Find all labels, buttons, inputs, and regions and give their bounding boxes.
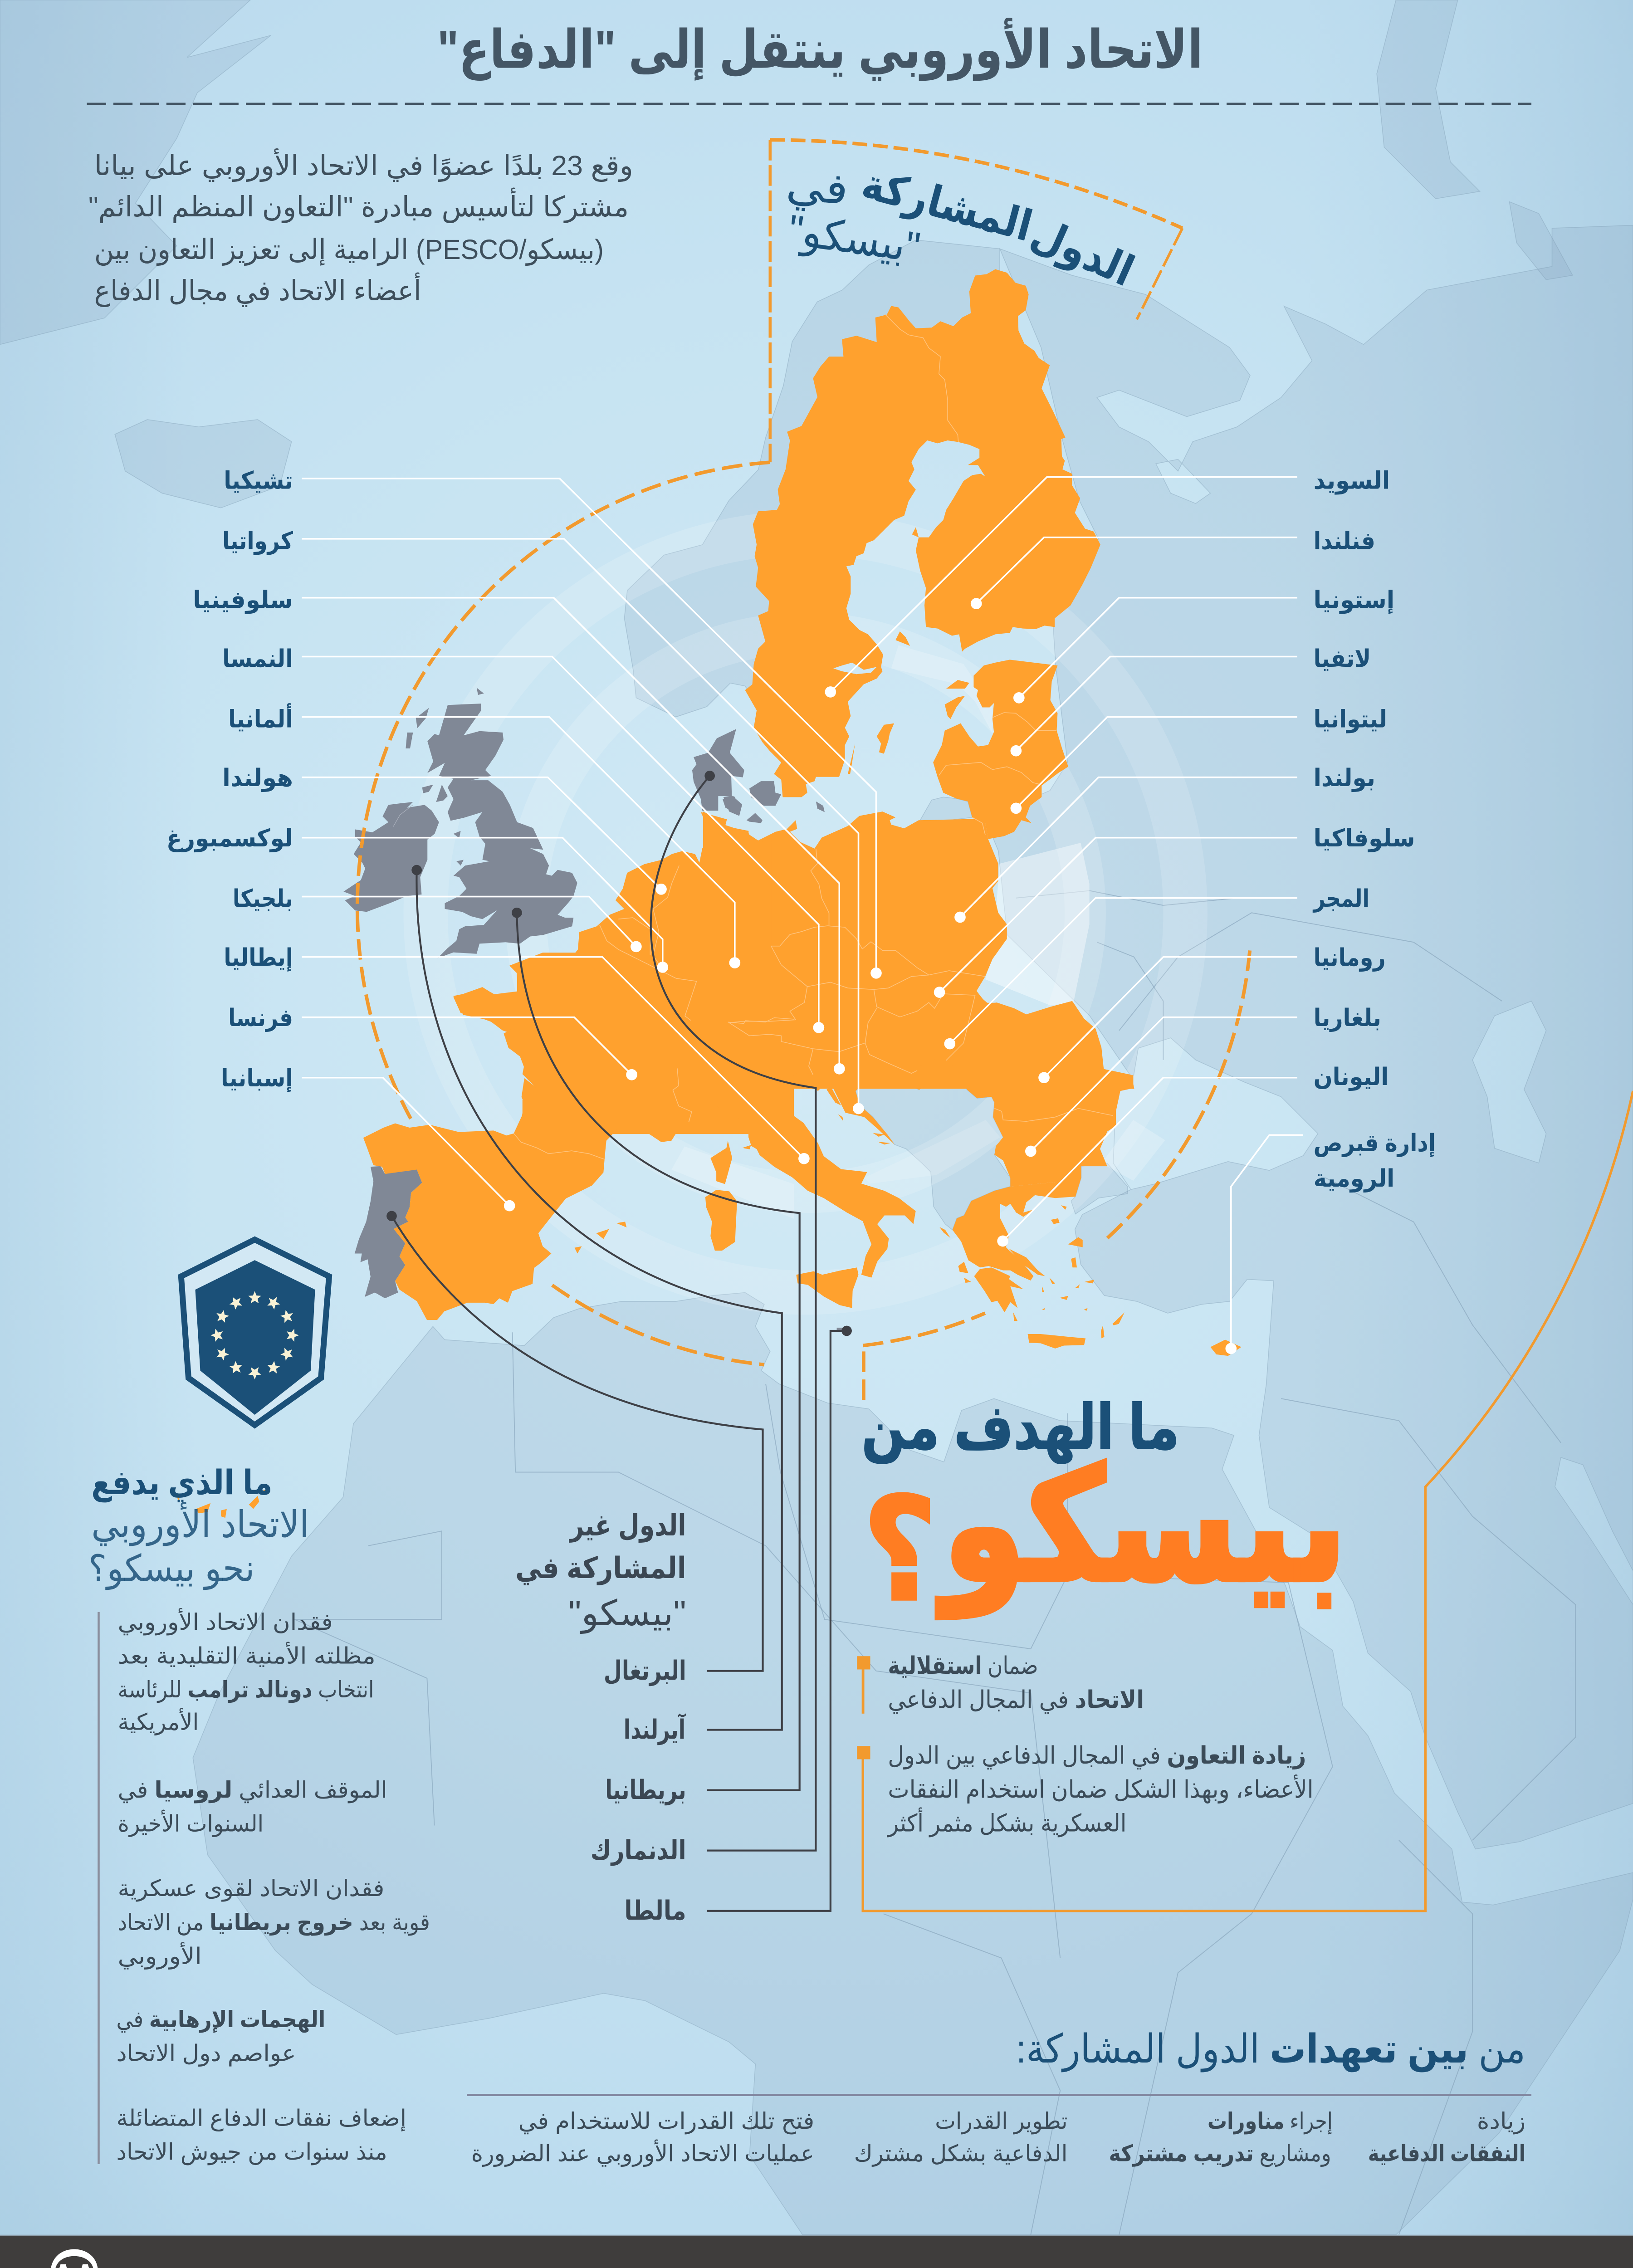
top frame of participating countries	[770, 140, 1183, 462]
left country labels: بلجيكا	[233, 885, 293, 912]
heading: what drives the EU: نحو بيسكو؟	[88, 1549, 255, 1590]
dark leader lines for non-participants	[391, 776, 847, 1911]
left country labels: تشيكيا	[224, 468, 293, 494]
right country labels: لاتفيا	[1314, 645, 1371, 672]
reasons list: الموقف العدائي لروسيا في	[118, 1777, 387, 1804]
heading: participating countries: في	[784, 161, 850, 215]
title: الاتحاد الأوروبي ينتقل إلى "الدفاع"	[437, 17, 1203, 81]
reasons list: منذ سنوات من جيوش الاتحاد	[116, 2139, 387, 2165]
goals bullets markers	[857, 1656, 870, 1759]
commitment columns: ومشاريع تدريب مشتركة	[1109, 2140, 1331, 2167]
left country labels: إيطاليا	[224, 944, 293, 972]
left country labels	[166, 468, 293, 1092]
reasons list	[116, 1608, 430, 2165]
heading: participating countries	[784, 159, 1141, 296]
dark map dots	[386, 771, 852, 1336]
non participating countries labels	[591, 1656, 686, 1926]
intro text: (بيسكو/PESCO) الرامية إلى تعزيز التعاون بين	[94, 234, 604, 266]
reasons list: الأمريكية	[118, 1708, 199, 1736]
big word PESCO: ؟	[863, 1471, 937, 1629]
goals text: الاتحاد في المجال الدفاعي	[888, 1686, 1144, 1714]
concentric radar rings	[425, 533, 1185, 1293]
goals text: ضمان استقلالية	[888, 1652, 1038, 1679]
commitment columns: تطوير القدرات	[935, 2108, 1067, 2135]
heading: non participating countries: المشاركة في	[515, 1551, 686, 1585]
white leader lines left	[302, 479, 876, 1206]
right country labels: سلوفاكيا	[1314, 825, 1415, 852]
commitment columns: إجراء مناورات	[1208, 2108, 1333, 2135]
logo: AA	[51, 2249, 98, 2268]
heading: commitments: من بين تعهدات الدول المشاركة:	[1016, 2027, 1525, 2072]
left country labels: النمسا	[222, 645, 293, 672]
intro text: أعضاء الاتحاد في مجال الدفاع	[94, 272, 421, 307]
right country labels: المجر	[1312, 885, 1369, 913]
reasons list: السنوات الأخيرة	[118, 1809, 264, 1837]
goals text: زيادة التعاون في المجال الدفاعي بين الدول	[888, 1742, 1306, 1769]
reasons list: انتخاب دونالد ترامب للرئاسة	[118, 1677, 374, 1703]
right country labels: إستونيا	[1314, 587, 1394, 614]
heading: non participating countries	[515, 1509, 686, 1634]
non participating countries labels: مالطا	[624, 1896, 686, 1926]
heading: participating countries: الدول	[1024, 209, 1141, 296]
orange frame around goals panel	[863, 1091, 1633, 1911]
commitment columns: النفقات الدفاعية	[1368, 2140, 1525, 2166]
icon: EU shield	[181, 1240, 329, 1425]
right country labels: بولندا	[1314, 765, 1375, 792]
heading: participating countries: المشاركة	[857, 159, 1037, 251]
right country labels: بلغاريا	[1314, 1005, 1381, 1032]
reasons list: إضعاف نفقات الدفاع المتضائلة	[116, 2105, 406, 2132]
left country labels: ألمانيا	[228, 703, 293, 733]
commitment columns: زيادة	[1477, 2108, 1525, 2134]
white leader lines right	[831, 477, 1303, 1349]
commitment columns: فتح تلك القدرات للاستخدام في	[518, 2108, 814, 2135]
reasons vertical rule	[98, 1612, 100, 2164]
internal country borders	[514, 315, 1113, 1159]
goals text: العسكرية بشكل مثمر أكثر	[887, 1807, 1126, 1837]
reasons list: الأوروبي	[118, 1942, 202, 1970]
big word PESCO: بيسكو	[936, 1438, 1347, 1618]
bright wedges	[671, 645, 1165, 1219]
reasons list: عواصم دول الاتحاد	[116, 2040, 296, 2067]
right country labels: رومانيا	[1314, 944, 1386, 972]
heading: non participating countries: "بيسكو"	[568, 1593, 686, 1634]
left country labels: إسبانيا	[221, 1065, 293, 1092]
dashed orange circle	[357, 462, 1250, 1400]
heading: participating countries: "بيسكو"	[785, 205, 923, 273]
reasons list: مظلته الأمنية التقليدية بعد	[118, 1641, 376, 1668]
title divider	[87, 103, 1531, 104]
right country labels	[1312, 468, 1436, 1193]
Switzerland	[655, 1016, 750, 1068]
footer bar	[0, 2235, 1633, 2268]
commitment columns: الدفاعية بشكل مشترك	[854, 2140, 1067, 2167]
heading: non participating countries: الدول غير	[569, 1509, 686, 1543]
reasons list: فقدان الاتحاد لقوى عسكرية	[118, 1875, 384, 1902]
right country labels: السويد	[1314, 468, 1390, 495]
goals text	[887, 1652, 1314, 1837]
non participating countries labels: بريطانيا	[605, 1775, 686, 1806]
right country labels: الرومية	[1314, 1165, 1394, 1193]
big word PESCO	[863, 1438, 1347, 1629]
left country labels: فرنسا	[228, 1005, 293, 1032]
commitments rule	[467, 2094, 1531, 2096]
intro text: وقع 23 بلدًا عضوًا في الاتحاد الأوروبي على بيانا	[94, 148, 633, 182]
reasons list: فقدان الاتحاد الأوروبي	[118, 1608, 333, 1636]
reasons list: الهجمات الإرهابية في	[116, 2006, 325, 2033]
non participating countries labels: الدنمارك	[591, 1836, 686, 1866]
left country labels: كرواتيا	[222, 528, 293, 555]
left country labels: هولندا	[222, 765, 293, 792]
Canary Islands	[177, 1488, 269, 1518]
non participating countries labels: آيرلندا	[624, 1713, 686, 1745]
reasons list: قوية بعد خروج بريطانيا من الاتحاد	[118, 1909, 430, 1936]
intro text: مشتركا لتأسيس مبادرة "التعاون المنظم الدائم"	[88, 187, 629, 223]
white map dots	[504, 598, 1237, 1354]
right country labels: اليونان	[1314, 1064, 1389, 1091]
left country labels: سلوفينيا	[193, 587, 293, 614]
Ireland border	[393, 805, 413, 826]
heading: what drives the EU: ما الذي يدفع	[91, 1463, 273, 1503]
commitment columns	[471, 2108, 1525, 2167]
goals text: الأعضاء، وبهذا الشكل ضمان استخدام النفقات	[888, 1774, 1314, 1804]
intro text	[88, 148, 633, 307]
non participating countries labels: البرتغال	[604, 1656, 686, 1686]
left country labels: لوكسمبورغ	[166, 825, 293, 852]
heading: what drives the EU	[88, 1463, 309, 1590]
country borders on background land	[294, 891, 1575, 2235]
heading: what is the goal: ما الهدف من	[861, 1393, 1179, 1464]
right country labels: إدارة قبرص	[1314, 1130, 1436, 1157]
non-participating countries map	[343, 688, 842, 1331]
commitment columns: عمليات الاتحاد الأوروبي عند الضرورة	[471, 2139, 814, 2167]
heading: what drives the EU: الاتحاد الأوروبي	[91, 1501, 309, 1546]
right country labels: فنلندا	[1314, 528, 1375, 555]
right country labels: ليتوانيا	[1314, 706, 1387, 733]
participating countries map	[363, 269, 1242, 1356]
